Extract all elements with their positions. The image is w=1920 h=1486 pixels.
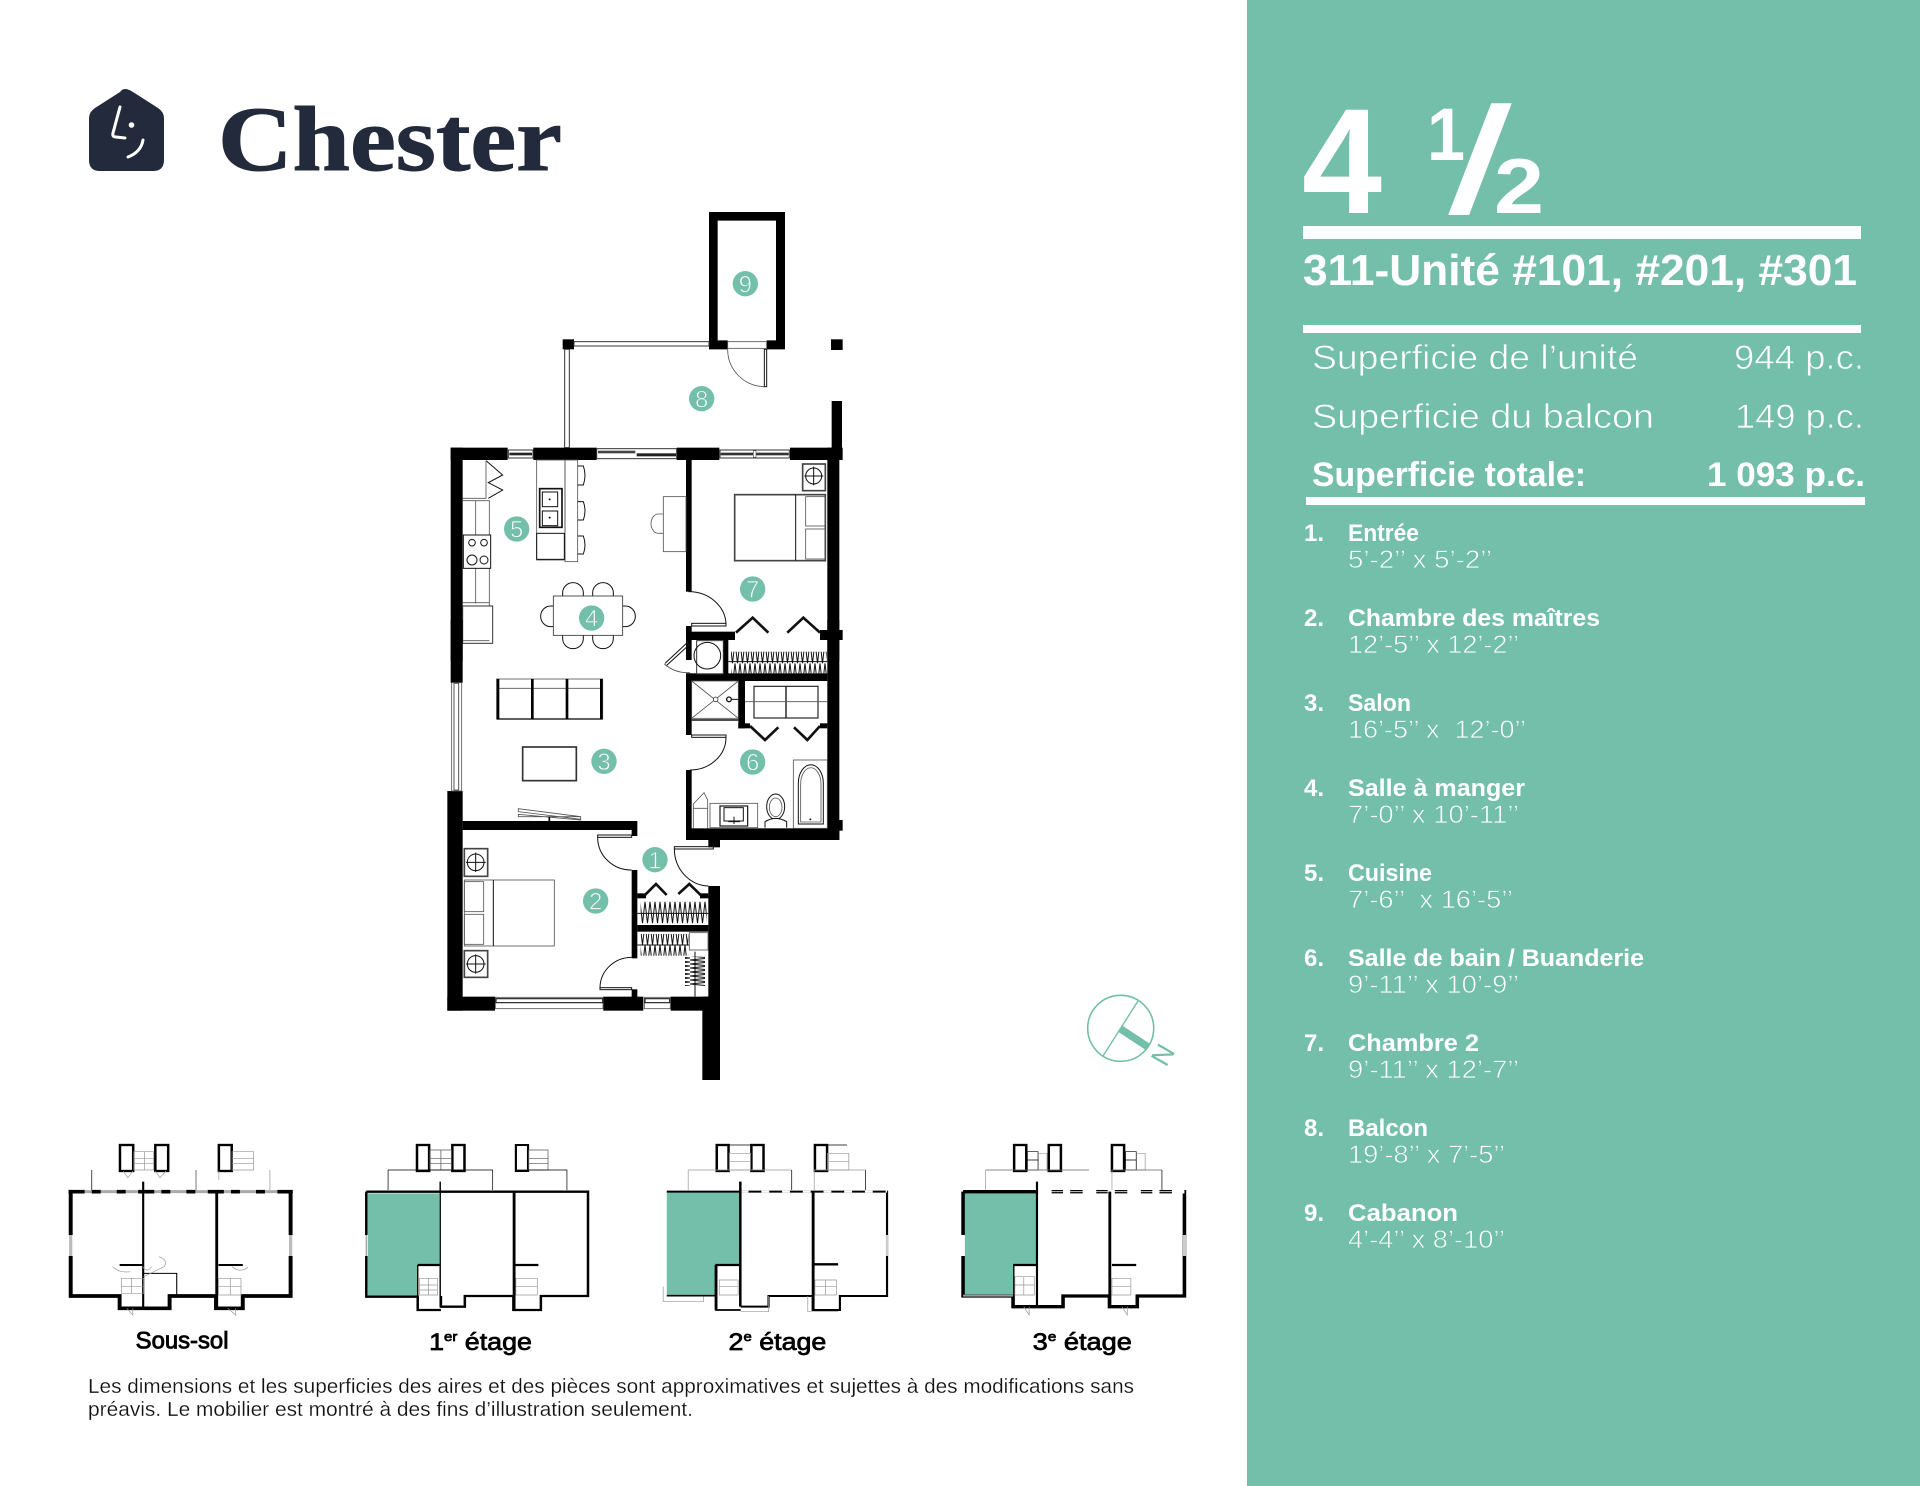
heading: 4 ½: 4 (1302, 77, 1382, 245)
room 9: Cabanon (1348, 1200, 1458, 1227)
label: 2e étage: e (743, 1328, 752, 1344)
room 7 (1304, 1030, 1519, 1084)
room 8: 19’-8’’ x 7’-5’’ (1348, 1141, 1505, 1169)
floor plan: unit layout (447, 212, 843, 1080)
master bedroom doors (598, 835, 632, 990)
room 8 (1304, 1115, 1505, 1169)
room 3: 3. (1304, 690, 1324, 717)
room marker 8 (689, 386, 714, 413)
room 1 (1304, 520, 1492, 574)
room 1: 5’-2’’ x 5’-2’’ (1348, 546, 1492, 574)
room marker 6: 6 (746, 750, 759, 777)
room 2: 2. (1304, 605, 1324, 632)
room marker 3 (591, 749, 617, 776)
windows: salon and master bedroom (452, 683, 670, 1009)
room marker 1 (642, 847, 668, 874)
room 7: 9’-11’’ x 12’-7’’ (1348, 1056, 1519, 1084)
room 1: 1. (1304, 520, 1324, 547)
salon coffee table (523, 747, 576, 781)
room 3: 16’-5’’ x 12’-0’’ (1348, 716, 1526, 744)
washer and dryer with folding doors (745, 686, 827, 740)
desk and chair (651, 497, 686, 552)
room 6: Salle de bain / Buanderie (1348, 945, 1644, 972)
footer disclaimer: Les dimensions et les superficies des aires et des pièces sont approximatives et sujettes à des modifications sans (88, 1376, 1134, 1398)
heading: 4 ½: / (1451, 79, 1510, 244)
room marker 3: 3 (597, 749, 611, 776)
balcony railing and posts (563, 339, 843, 449)
room marker 9: 9 (739, 271, 752, 298)
entrance door (674, 847, 713, 886)
panel: right teal sidebar (1247, 0, 1920, 1486)
key plan: basement (69, 1145, 293, 1315)
heading: 4 ½: 2 (1494, 142, 1544, 230)
windows on the balcony side (508, 449, 789, 459)
room 3: Salon (1348, 690, 1411, 717)
exterior and bedroom walls, upper (451, 448, 843, 661)
bedroom 2 furniture (735, 464, 825, 561)
room 1: Entrée (1348, 520, 1419, 547)
title: Chester: Chester (218, 88, 562, 190)
room 6: 6. (1304, 945, 1324, 972)
room 9: 4’-4’’ x 8’-10’’ (1348, 1226, 1505, 1254)
room 6: 9’-11’’ x 10’-9’’ (1348, 971, 1519, 999)
laundry closet: washer and door (664, 641, 723, 674)
room marker 5 (504, 516, 529, 544)
room marker 4: 4 (585, 606, 598, 633)
room 2 (1304, 605, 1600, 659)
label: 3e étage: 3 (1033, 1329, 1047, 1356)
heading: 4 ½ (1302, 77, 1544, 245)
room 4 (1304, 775, 1525, 829)
room 5: 7’-6’’ x 16’-5’’ (1348, 886, 1513, 914)
entrance folding closet doors (645, 884, 701, 895)
row: unit area (1312, 339, 1864, 377)
closet rods and hangers (637, 652, 827, 997)
interior and exterior walls, lower (447, 620, 843, 1080)
label: 1er étage: 1 (429, 1329, 443, 1356)
bathroom: shower (692, 681, 738, 720)
row: unit area: 944 p.c. (1734, 339, 1864, 377)
footer disclaimer (88, 1376, 1134, 1421)
area table (1312, 339, 1865, 494)
row: total area (1312, 456, 1865, 494)
label: Sous-sol: Sous-sol (136, 1327, 229, 1354)
salon TV (518, 809, 581, 821)
divider rule (1306, 497, 1865, 505)
label: 3e étage: e (1048, 1328, 1057, 1344)
row: total area: 1 093 p.c. (1707, 456, 1865, 494)
room 2: Chambre des maîtres (1348, 605, 1600, 632)
room marker 8: 8 (695, 386, 708, 413)
icon: north compass: N (1145, 1039, 1180, 1071)
row: unit area: Superficie de l’unité (1312, 339, 1638, 377)
row: total area: Superficie totale: (1312, 456, 1586, 494)
heading: 4 ½: 1 (1427, 93, 1465, 176)
footer disclaimer: préavis. Le mobilier est montré à des fins d’illustration seulement. (88, 1399, 693, 1421)
room 8: Balcon (1348, 1115, 1428, 1142)
room 9: 9. (1304, 1200, 1324, 1227)
door: bedroom 2 (688, 592, 726, 626)
label: 1er étage: étage (457, 1329, 532, 1356)
logo icon: house badge (89, 89, 164, 171)
room 5: Cuisine (1348, 860, 1432, 887)
dining table and chairs (541, 583, 635, 649)
room 7: 7. (1304, 1030, 1324, 1057)
key plan: second floor (663, 1145, 887, 1312)
row: balcony area (1312, 398, 1864, 436)
room marker 7 (740, 576, 765, 604)
row: balcony area: 149 p.c. (1735, 398, 1864, 436)
label: 1er étage: er (444, 1328, 458, 1344)
room marker 6 (740, 749, 765, 777)
room 6 (1304, 945, 1644, 999)
folding closet doors: bedroom 2 (736, 618, 820, 633)
room marker 1: 1 (648, 847, 662, 874)
room marker 5: 5 (510, 517, 523, 544)
room 2: 12’-5’’ x 12’-2’’ (1348, 631, 1519, 659)
icon: north compass (1088, 995, 1180, 1071)
room marker 9 (733, 271, 758, 298)
room marker 7: 7 (746, 577, 759, 604)
unit identifier: 311-Unité #101, #201, #301 (1303, 246, 1857, 295)
room: shed with door (709, 212, 785, 387)
label: 2e étage: 2 (729, 1329, 743, 1356)
bathroom: tub, toilet, vanity (693, 760, 827, 828)
bathroom door (690, 735, 726, 770)
master bedroom bed and night tables (464, 849, 554, 977)
room 8: 8. (1304, 1115, 1324, 1142)
room 4: 7’-0’’ x 10’-11’’ (1348, 801, 1519, 829)
key plan: first floor (366, 1145, 588, 1310)
divider rule (1303, 325, 1861, 333)
room 3 (1304, 690, 1526, 744)
kitchen counter, stove and fridge (463, 461, 503, 643)
room 7: Chambre 2 (1348, 1030, 1479, 1057)
row: balcony area: Superficie du balcon (1312, 398, 1654, 436)
key plan: third floor (963, 1145, 1184, 1315)
room 5: 5. (1304, 860, 1324, 887)
room marker 4 (579, 605, 604, 633)
room 9 (1304, 1200, 1505, 1254)
divider rule (1303, 226, 1861, 239)
room marker 2: 2 (589, 889, 602, 916)
room marker 2 (583, 888, 608, 916)
room list (1304, 520, 1644, 1254)
room 4: Salle à manger (1348, 775, 1525, 802)
label: 2e étage: étage (752, 1329, 826, 1356)
label: 3e étage: étage (1056, 1329, 1132, 1356)
kitchen island with sink and stools (537, 460, 585, 562)
room 5 (1304, 860, 1513, 914)
salon sofa (497, 679, 603, 719)
room 4: 4. (1304, 775, 1324, 802)
